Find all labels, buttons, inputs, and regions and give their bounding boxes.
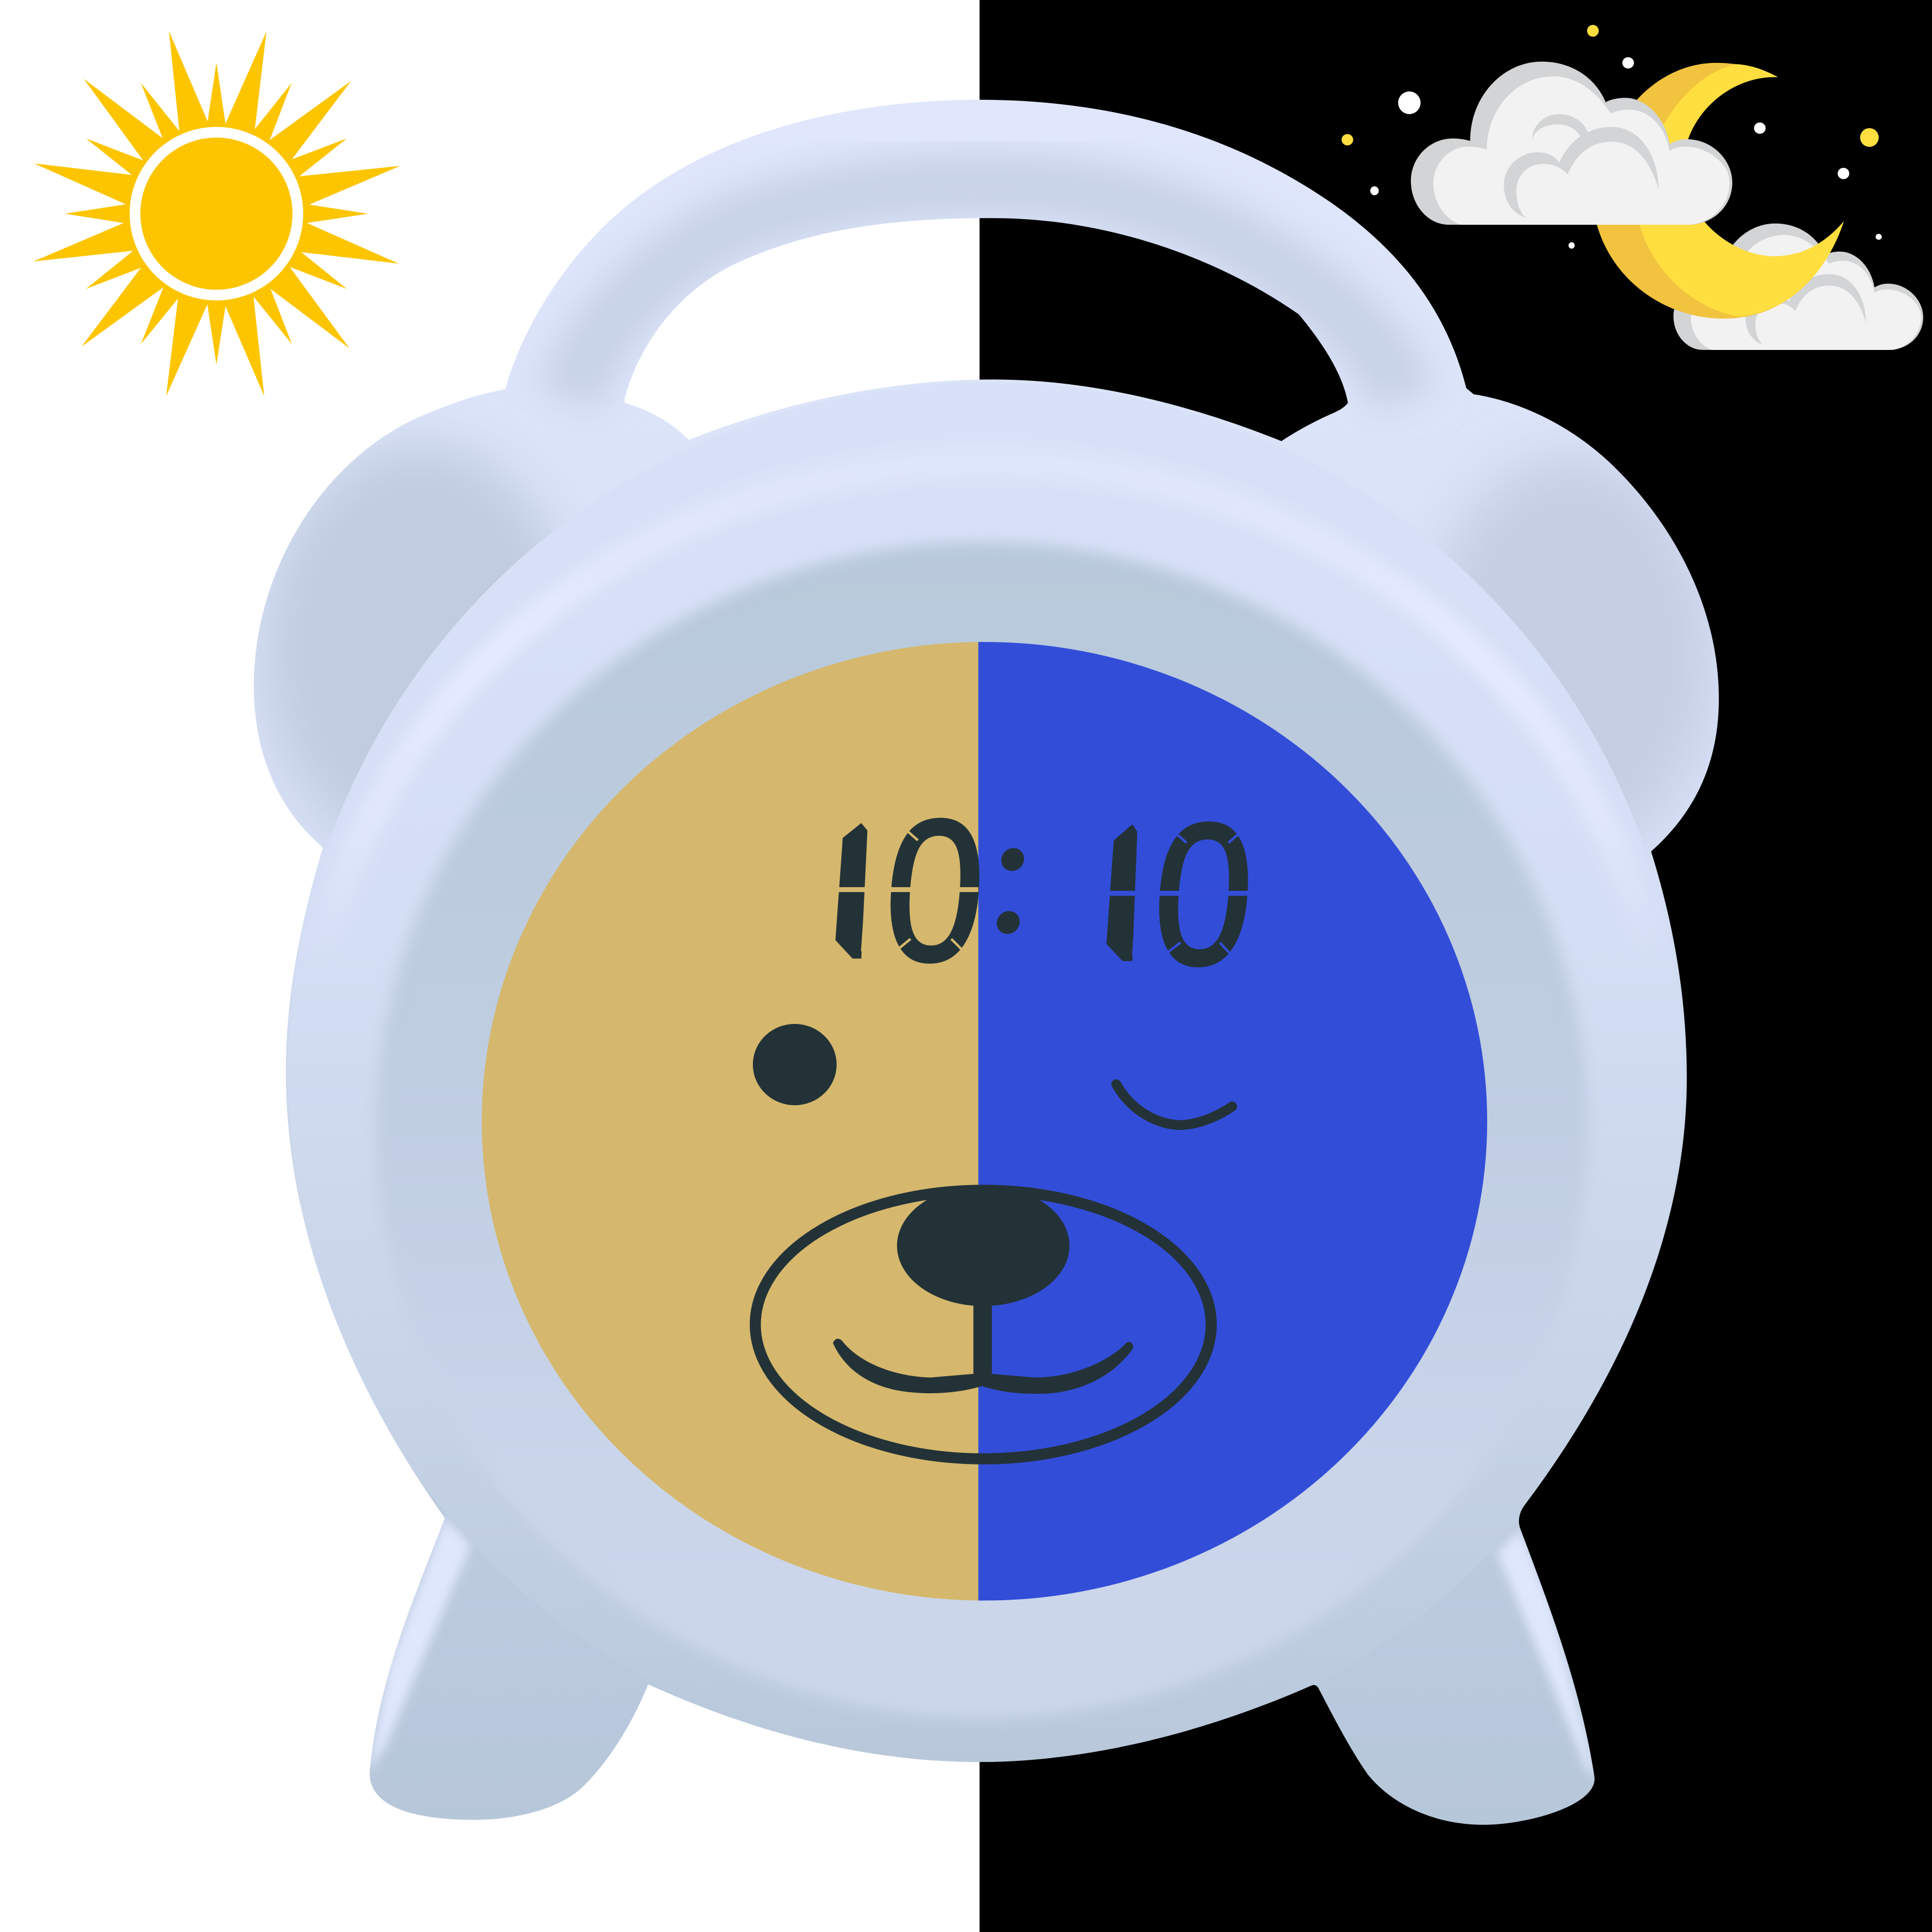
open left eye: [753, 1024, 837, 1105]
background: night half: [980, 0, 1932, 1932]
handle shading: [569, 185, 1405, 400]
muzzle outline: [755, 1190, 1211, 1459]
icon: moon, clouds and stars: [1341, 25, 1923, 350]
bear muzzle: [755, 1185, 1211, 1459]
day half of display: [482, 642, 1487, 1601]
background: day half: [0, 0, 980, 1932]
clock time 10:10: 1: [1051, 781, 1187, 1021]
inner recess: [376, 542, 1588, 1718]
left foot highlight: [367, 1518, 471, 1774]
casing highlight band: [347, 501, 1624, 863]
closed right eye: [1116, 1084, 1232, 1125]
left ear shading: [265, 444, 573, 850]
night half of display: [482, 642, 1487, 1601]
right foot highlight: [1497, 1529, 1597, 1777]
clock time 10:10: 0: [878, 778, 992, 1002]
right ear shading: [1429, 456, 1713, 850]
clock time 10:10: 0: [1147, 782, 1261, 1006]
nose: [897, 1185, 1070, 1306]
smile: [833, 1339, 1133, 1394]
display face: [482, 642, 1487, 1601]
philtrum: [973, 1300, 992, 1384]
bear clock body: [254, 100, 1719, 1825]
clock time 10:10: :: [981, 777, 1043, 968]
clock time 10:10: [780, 777, 1261, 1021]
clock time 10:10: 1: [780, 777, 916, 1017]
front casing: [305, 532, 1664, 1762]
icon: sun: [34, 31, 400, 396]
